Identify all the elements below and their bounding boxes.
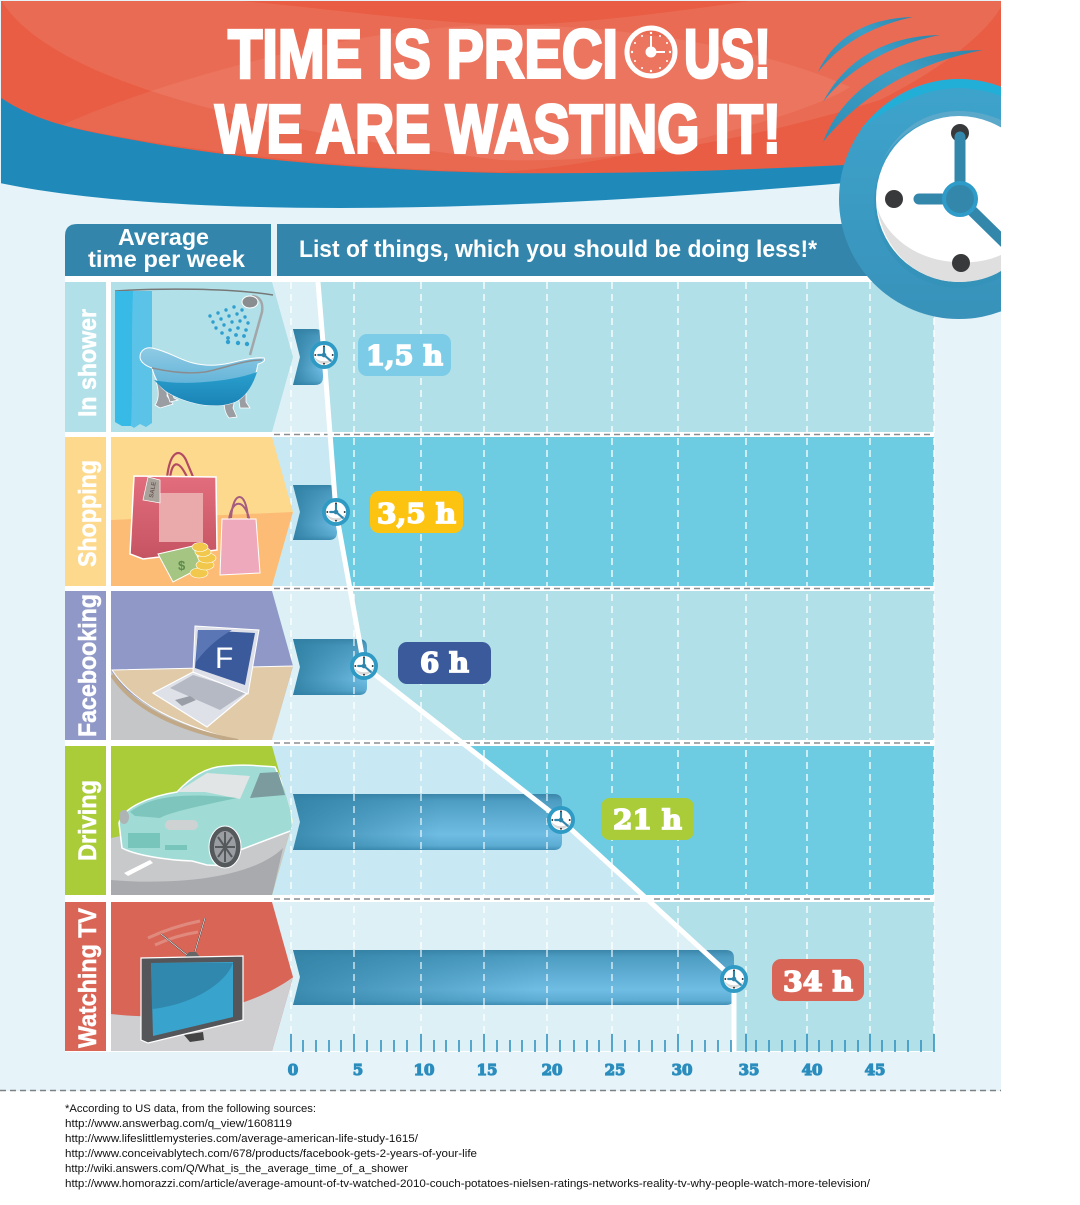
laptop lid bbox=[193, 626, 259, 694]
header: average time per week bbox=[65, 224, 271, 276]
floor bbox=[111, 512, 293, 586]
table edge bbox=[112, 675, 238, 741]
icon: clock marker tv bbox=[720, 965, 748, 993]
sale tag bbox=[143, 477, 160, 503]
chart: time per week bbox=[272, 282, 934, 1079]
sources footnote: http://www.conceivablytech.com/678/products/facebook-gets-2-years-of-your-life bbox=[65, 1148, 477, 1160]
axis labels bbox=[288, 1061, 885, 1079]
wheel bbox=[209, 826, 241, 868]
banner bbox=[0, 0, 1001, 208]
bag window bbox=[159, 493, 203, 542]
icon: clock marker shower bbox=[310, 341, 338, 369]
label: shopping: Shopping bbox=[74, 460, 102, 567]
title line one right: US! bbox=[684, 16, 771, 92]
bar: driving bbox=[293, 794, 562, 850]
icon: big clock bbox=[839, 79, 1079, 319]
antennas bbox=[161, 918, 205, 955]
axis ticks bbox=[291, 1034, 934, 1052]
front grille bbox=[128, 833, 160, 848]
keyboard bbox=[170, 675, 247, 710]
value: facebooking: 6 h bbox=[420, 648, 469, 679]
sources footnote: http://www.lifeslittlemysteries.com/average-american-life-study-1615/ bbox=[65, 1133, 419, 1145]
axis labels: 40 bbox=[802, 1061, 822, 1079]
label: facebooking bbox=[65, 591, 106, 740]
shower head bbox=[242, 296, 258, 308]
axis labels: 35 bbox=[739, 1061, 759, 1079]
label: watching tv bbox=[65, 902, 106, 1051]
clock face shade bbox=[874, 118, 1044, 288]
header: list of things: List of things, which you should be doing less!* bbox=[299, 236, 818, 263]
clock hands bbox=[919, 137, 1010, 248]
chart row backgrounds bbox=[272, 282, 934, 1051]
tv frame bbox=[141, 956, 243, 1043]
antenna motion bbox=[148, 921, 200, 945]
value: shower bbox=[358, 334, 451, 376]
road dark base bbox=[111, 848, 283, 896]
axis labels: 25 bbox=[605, 1061, 625, 1079]
axis labels: 20 bbox=[542, 1061, 562, 1079]
lower grille bbox=[165, 845, 187, 850]
clock dots bbox=[951, 124, 969, 142]
antenna base bbox=[185, 952, 200, 957]
value: shower: 1,5 h bbox=[366, 341, 443, 372]
sources footnote: http://www.answerbag.com/q_view/1608119 bbox=[65, 1118, 292, 1130]
label: watching tv: Watching TV bbox=[74, 908, 102, 1048]
grey floor bbox=[111, 975, 296, 1052]
bag handles bbox=[166, 452, 194, 476]
tub body bbox=[140, 348, 265, 406]
label: driving bbox=[65, 746, 106, 895]
trackpad bbox=[175, 696, 196, 706]
label: in shower bbox=[65, 282, 106, 432]
dollar sign: $ bbox=[178, 558, 186, 573]
tv stand bbox=[184, 1032, 204, 1042]
large bag bbox=[130, 476, 217, 559]
laptop base bbox=[153, 672, 248, 727]
value: shopping bbox=[370, 491, 463, 533]
side window bbox=[250, 772, 285, 798]
motion swooshes bbox=[818, 17, 983, 142]
banner light shape one bbox=[3, 1, 1001, 160]
curtain bbox=[115, 291, 152, 428]
value: driving bbox=[601, 798, 694, 840]
value: watching tv bbox=[772, 959, 864, 1001]
tub water bbox=[154, 372, 257, 406]
label: in shower: In shower bbox=[74, 309, 102, 417]
small bag handle bbox=[229, 497, 250, 522]
header: average time per week: Average bbox=[118, 224, 209, 250]
ring highlight bbox=[860, 79, 1001, 130]
icon: clock marker facebooking bbox=[350, 652, 378, 680]
title line one left: TIME IS PRECI bbox=[228, 16, 618, 92]
axis labels: 5 bbox=[353, 1061, 363, 1079]
tub feet bbox=[155, 381, 250, 418]
panel: car illustration bbox=[111, 746, 296, 896]
coins bbox=[190, 542, 216, 578]
panel: television illustration bbox=[111, 902, 296, 1052]
banner light shape two bbox=[62, 25, 850, 172]
table bbox=[112, 666, 294, 741]
face grey crescent bbox=[877, 207, 1001, 282]
axis labels: 45 bbox=[865, 1061, 885, 1079]
shower pipe bbox=[250, 296, 262, 355]
road mark bbox=[124, 860, 153, 876]
axis labels: 10 bbox=[414, 1061, 434, 1079]
hood shadow bbox=[130, 796, 237, 818]
swoosh two bbox=[823, 35, 940, 102]
panel: laptop illustration bbox=[111, 591, 296, 741]
money bbox=[158, 546, 202, 582]
bar: shopping bbox=[293, 485, 337, 540]
label: facebooking: Facebooking bbox=[74, 594, 102, 737]
screen shade bbox=[151, 963, 233, 1009]
sources footnote: http://www.homorazzi.com/article/average-amount-of-tv-watched-2010-couch-potatoes-nielsen-ratings-networks-reality-tv-why-people-watch-more-television/ bbox=[65, 1178, 871, 1190]
windshield bbox=[177, 773, 250, 799]
car body bbox=[119, 765, 293, 866]
value: driving: 21 h bbox=[613, 805, 682, 836]
header: list of things bbox=[277, 224, 877, 276]
sources footnote bbox=[65, 1103, 871, 1190]
bar: in shower bbox=[293, 329, 323, 385]
table white backing bbox=[65, 276, 934, 1052]
icon: clock in title bbox=[627, 28, 675, 76]
swoosh three bbox=[823, 50, 983, 142]
headlight bbox=[165, 820, 198, 830]
water drops bbox=[208, 305, 250, 346]
trend line bbox=[318, 282, 734, 1052]
title line two: WE ARE WASTING IT! bbox=[215, 90, 781, 168]
laptop screen bbox=[195, 630, 255, 685]
axis labels: 30 bbox=[672, 1061, 692, 1079]
left headlight bbox=[119, 810, 129, 824]
bar: facebooking bbox=[293, 639, 367, 695]
sources footnote: *According to US data, from the following sources: bbox=[65, 1103, 316, 1115]
small bag bbox=[220, 519, 260, 575]
road bbox=[111, 822, 296, 896]
sources footnote: http://wiki.answers.com/Q/What_is_the_average_time_of_a_shower bbox=[65, 1163, 408, 1175]
clock ring bbox=[839, 79, 1079, 319]
swoosh one bbox=[818, 17, 913, 72]
footer divider bbox=[0, 1090, 1001, 1092]
title bbox=[215, 16, 781, 168]
header: average time per week: time per week bbox=[88, 246, 245, 272]
label: driving: Driving bbox=[74, 780, 102, 861]
banner coral wave bbox=[0, 0, 1001, 173]
label: shopping bbox=[65, 437, 106, 586]
screen letter: F bbox=[215, 642, 233, 675]
banner blue wave bbox=[1, 98, 844, 208]
value: facebooking bbox=[398, 642, 491, 684]
icon: clock marker shopping bbox=[322, 498, 350, 526]
bar: watching tv bbox=[293, 950, 734, 1005]
grey floor bbox=[111, 670, 223, 740]
tub rim bbox=[152, 360, 262, 373]
tv screen bbox=[151, 962, 233, 1036]
screen highlight bbox=[196, 630, 232, 662]
axis labels: 0 bbox=[288, 1061, 298, 1079]
value: watching tv: 34 h bbox=[783, 967, 853, 998]
sale tag: SALE bbox=[149, 482, 158, 498]
icon: clock marker driving bbox=[547, 806, 575, 834]
panel: bathtub illustration bbox=[111, 282, 296, 432]
value: shopping: 3,5 h bbox=[377, 499, 456, 530]
shower curtain rod bbox=[115, 289, 273, 295]
panel: shopping illustration bbox=[111, 437, 296, 587]
axis labels: 15 bbox=[477, 1061, 497, 1079]
face top rim bbox=[883, 111, 1001, 160]
clock face bbox=[876, 116, 1042, 282]
clock centre bbox=[944, 183, 976, 215]
curtain dark fold bbox=[115, 291, 133, 426]
